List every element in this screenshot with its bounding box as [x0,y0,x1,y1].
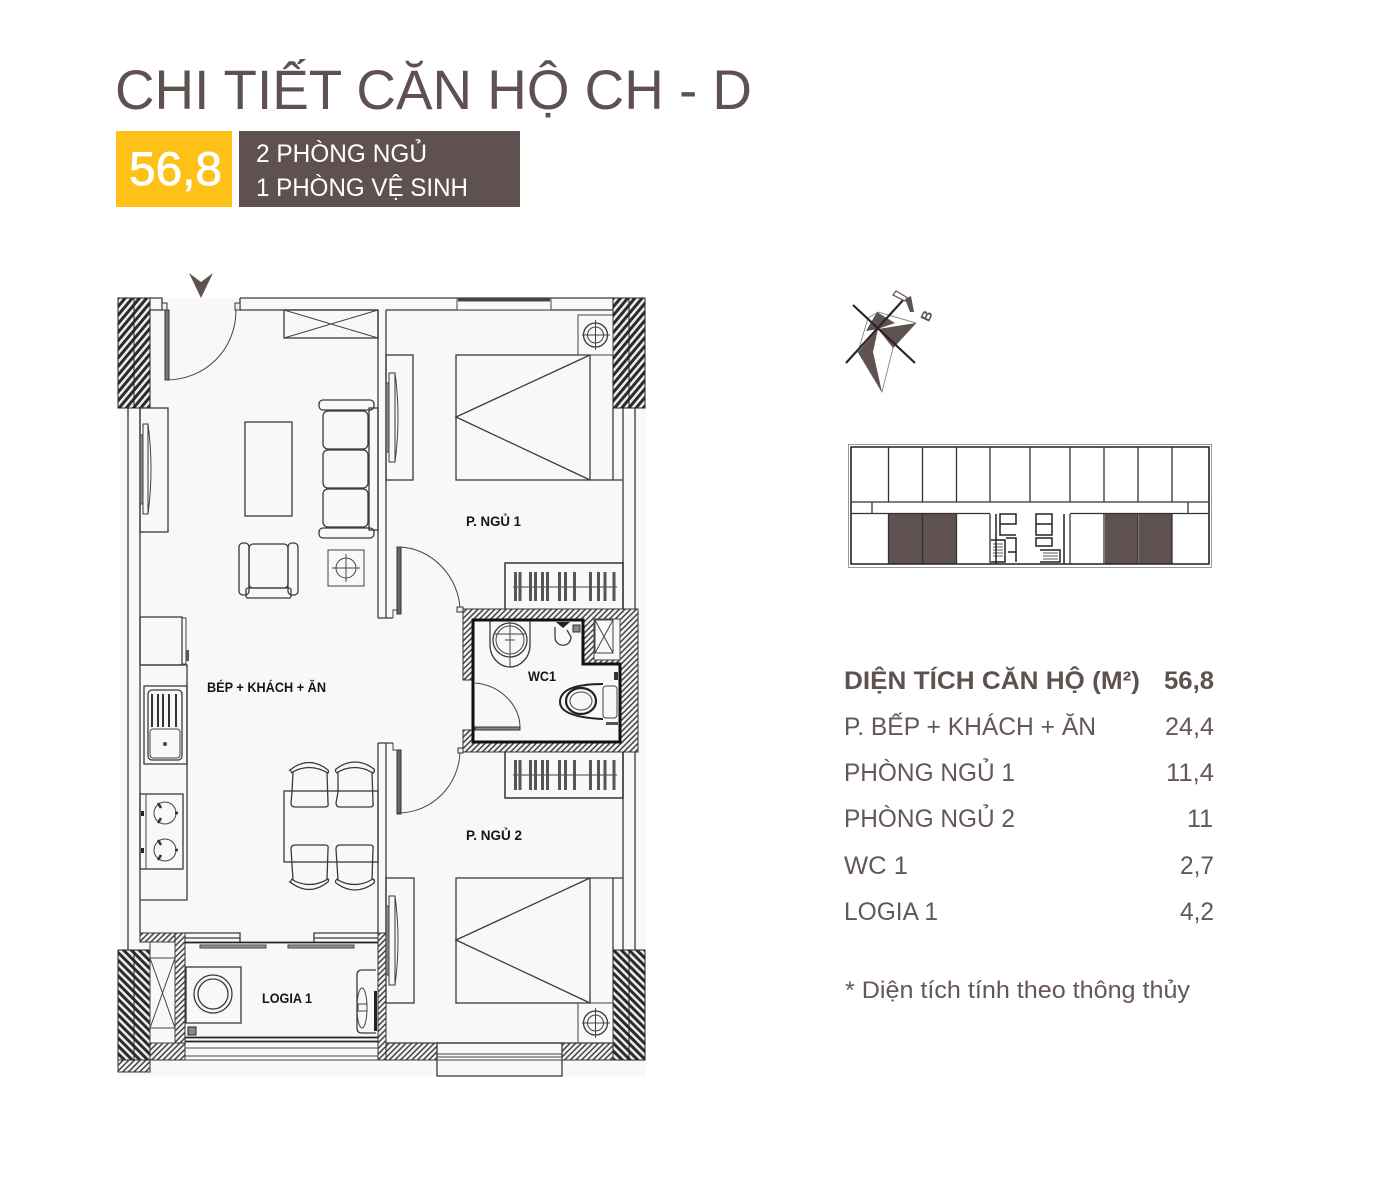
kitchen sink [144,686,187,764]
structural walls [128,298,635,950]
toilet [560,672,618,725]
door: bedroom 2 [393,743,463,814]
table row: bedroom 2 [844,803,1213,833]
room summary box: 2 PHÒNG NGỦ [256,138,427,168]
bathroom walls [463,609,638,752]
table row: bedroom 2: PHÒNG NGỦ 2 [844,803,1015,833]
armchair [239,543,298,598]
table row: total: 56,8 [1164,667,1214,695]
coffee table [245,422,292,516]
area badge: 56,8 [129,142,222,195]
floor plan [118,298,646,1076]
logia utility sink [357,970,377,1033]
icon: compass: B [917,308,936,324]
label: bedroom 2: P. NGỦ 2 [466,828,522,843]
washbasin [490,621,530,667]
table row: WC: 2,7 [1180,852,1214,880]
table row: WC [844,852,1214,880]
building key plan [848,444,1212,568]
highlighted apartments [889,514,1172,564]
lamp: bedroom 1 [578,315,613,355]
label: logia: LOGIA 1 [262,991,312,1006]
entrance door [162,303,240,380]
table row: kitchen and living [844,712,1214,741]
table row: bedroom 1: 11,4 [1166,759,1214,787]
logia walls [118,933,386,1072]
side table with lamp [328,550,364,586]
table row: bedroom 2: 11 [1187,805,1213,833]
table row: bedroom 1: PHÒNG NGỦ 1 [844,757,1015,787]
bathroom [463,609,638,752]
closet 1 [505,563,623,610]
shower shaft [594,619,620,660]
TV unit: bedroom 2 [386,878,414,1003]
bathroom floor [473,620,620,742]
washing machine [186,967,241,1035]
door: bedroom 1 [393,547,463,618]
bed 1 [456,355,623,480]
room summary box [239,131,520,207]
AC unit [284,310,378,338]
dining table and chairs [284,762,378,890]
table row: logia: 4,2 [1180,898,1214,926]
area table [844,665,1214,926]
title: CHI TIẾT CĂN HỘ CH - D [115,58,752,121]
label: WC: WC1 [528,669,556,684]
table row: kitchen and living: P. BẾP + KHÁCH + ĂN [844,712,1096,741]
kitchen counter [140,617,189,900]
building core [991,514,1064,564]
sofa [319,400,378,538]
door: WC [475,683,520,730]
table row: kitchen and living: 24,4 [1165,713,1214,741]
room summary box: 1 PHÒNG VỆ SINH [256,173,468,202]
area badge [116,131,232,207]
TV unit: bedroom 1 [386,355,413,480]
table row: bedroom 1 [844,757,1214,787]
table row: logia [844,898,1214,926]
table row: logia: LOGIA 1 [844,898,938,926]
label: kitchen and living: BÉP + KHÁCH + ĂN [207,680,326,695]
label: bedroom 1: P. NGỦ 1 [466,514,521,529]
closet 2 [505,752,623,798]
plan background [120,298,646,1076]
bed 2 [456,878,623,1003]
corner columns [118,298,645,1072]
icon: compass [846,291,936,392]
cooktop [140,794,183,869]
icon: entrance arrow [189,273,213,298]
table row: WC: WC 1 [844,852,908,880]
floor drain and hose [555,622,580,645]
table row: total: DIỆN TÍCH CĂN HỘ (M²) [844,665,1140,695]
footnote: * Diện tích tính theo thông thủy [845,977,1190,1004]
TV unit: living room [140,408,168,532]
lamp: bedroom 2 [578,1003,613,1043]
south wall and window [386,1043,613,1076]
